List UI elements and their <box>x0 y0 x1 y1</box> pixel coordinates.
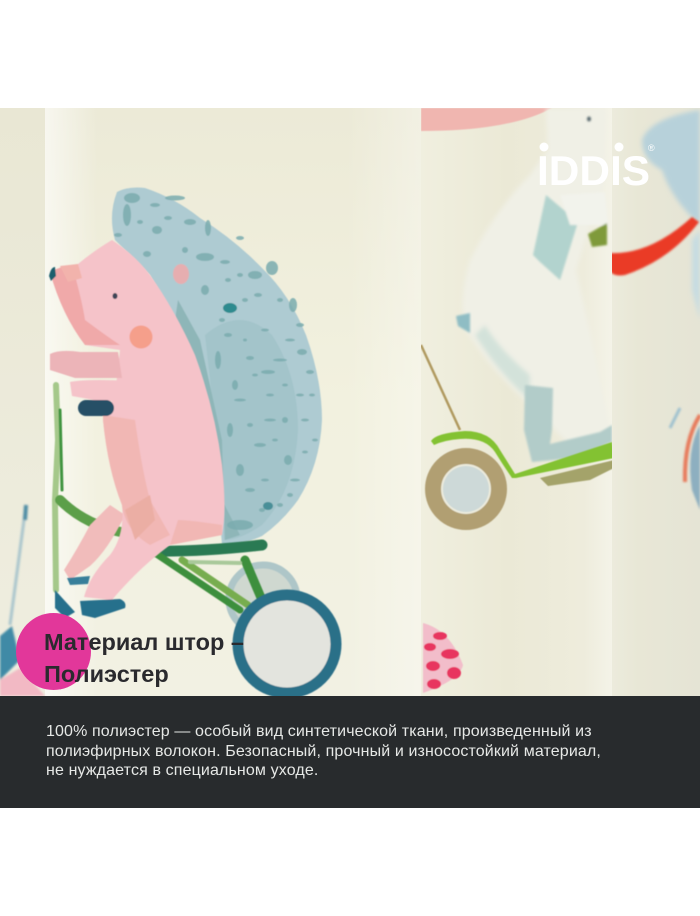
heading text <box>44 629 244 687</box>
hedgehog spines <box>112 188 322 544</box>
curtain folds <box>0 108 700 696</box>
tricycle frame <box>55 385 262 610</box>
elephant and red scarf <box>610 110 700 510</box>
hedgehog body <box>49 240 224 618</box>
logo: iddis: ® <box>648 143 655 153</box>
bear details <box>456 116 612 462</box>
body text <box>46 723 601 779</box>
rear wheel far <box>229 565 297 633</box>
body text: полиэфирных волокон. Безопасный, прочный и износостойкий материал, <box>46 743 601 760</box>
scooter <box>421 345 614 522</box>
heading text: Полиэстер <box>44 661 169 687</box>
pink circle <box>16 613 91 690</box>
text band <box>0 696 700 808</box>
curtain photo illustration <box>0 108 700 696</box>
front wheel <box>238 595 336 693</box>
hedgehog on tricycle <box>49 188 336 693</box>
heading with pink dot <box>16 613 244 690</box>
body text: не нуждается в специальном уходе. <box>46 762 318 779</box>
heading text: Материал штор – <box>44 629 244 655</box>
left fold figure <box>0 505 45 696</box>
body text: 100% полиэстер — особый вид синтетической ткани, произведенный из <box>46 723 592 740</box>
spotted shape <box>423 623 463 693</box>
pig and bear on scooter <box>421 108 614 693</box>
pink shape at top <box>421 108 552 131</box>
bear body <box>464 108 588 439</box>
